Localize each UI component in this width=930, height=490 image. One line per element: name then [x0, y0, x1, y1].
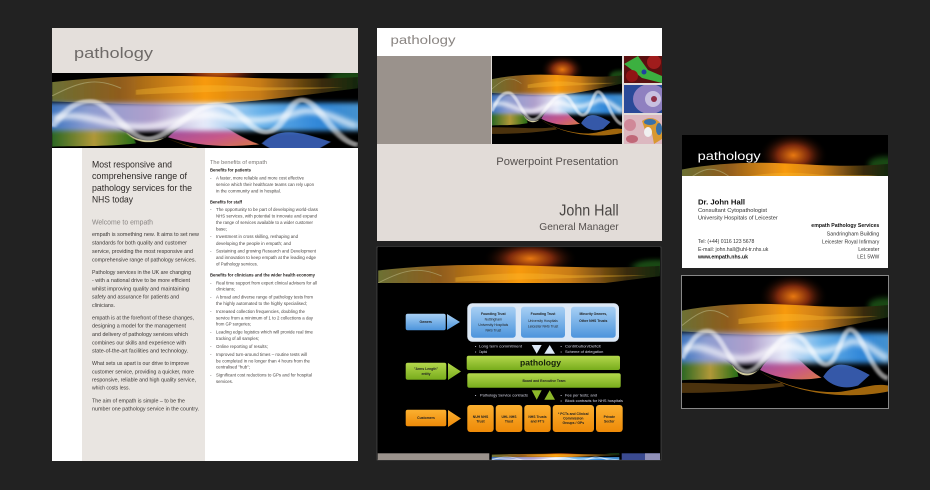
- flow notes: owners to pathology: Contribution/Deficit: [565, 344, 601, 348]
- card address: [811, 223, 880, 261]
- card contact details: [697, 239, 769, 261]
- left column body text: designing a model for the management: [92, 324, 187, 330]
- flow notes: pathology to customers: Block contracts for NHS hospitals: [565, 399, 623, 403]
- right column: benefits of empath: Real time support from expert clinical advisers for all: [216, 280, 317, 285]
- row: customers: Trust: [476, 420, 486, 424]
- owner cards: NHS Trust: [485, 328, 501, 332]
- right column: benefits of empath: the highly automated to the highly specialised;: [216, 301, 307, 306]
- right column: benefits of empath: service from a minimum of 1 to 2 collections a day: [216, 315, 314, 320]
- right column: benefits of empath: -: [210, 352, 212, 357]
- left column body text: Pathology services in the UK are changing: [92, 270, 191, 276]
- card address: LE1 5WW: [857, 255, 880, 261]
- left column body text: [91, 232, 199, 413]
- microscopy image: blue and purple tissue: [624, 85, 662, 113]
- card address: empath Pathology Services: [811, 223, 880, 229]
- owner cards: Leicester NHS Trust: [528, 324, 558, 328]
- presenter name: John Hall: [559, 202, 619, 220]
- right column: benefits of empath: A faster, more reliable and more cost effective: [216, 175, 304, 180]
- left column body text: combines our skills and experience with: [92, 340, 186, 346]
- chart slide banner: [378, 247, 660, 283]
- card contact details: www.empath.nhs.uk: [697, 255, 748, 261]
- right column: benefits of empath: Significant cost reductions to GPs and for hospital: [216, 373, 312, 378]
- right column: benefits of empath: of Pathology services.: [216, 261, 258, 266]
- row: customers: NHS Trusts: [528, 415, 547, 419]
- row: pathology entity: pathology: [520, 358, 561, 368]
- row: customers: Groups / GPs: [562, 421, 584, 425]
- card address: Leicester: [858, 247, 880, 253]
- row: customers: Sector: [604, 420, 615, 424]
- right column: benefits of empath: be completed in no longer than 4 hours from the: [216, 358, 310, 363]
- owner cards: Founding Trust: [531, 312, 556, 316]
- right column: benefits of empath: Increased collection frequencies, doubling the: [216, 309, 305, 314]
- card contact details: Tel: (+44) 0116 123 5678: [698, 239, 755, 245]
- left column body text: What sets us apart is our drive to improve: [92, 361, 189, 367]
- row: customers: Trust: [505, 420, 514, 424]
- right column: benefits of empath: A broad and diverse range of pathology tests from: [216, 295, 313, 300]
- owner cards: Nottingham: [485, 318, 502, 322]
- left column body text: standards for both quality and customer: [92, 240, 187, 246]
- left column body text: comprehensive range of pathology services.: [92, 257, 196, 263]
- row: customers: UHL NHS: [501, 415, 517, 419]
- right column: benefits of empath: -: [210, 249, 212, 254]
- flow notes: owners to pathology: •: [475, 350, 477, 354]
- right column: benefits of empath: centralised "hub";: [216, 365, 250, 370]
- right column: benefits of empath: and innovation to keep empath at the leading edge: [216, 255, 316, 260]
- brochure headline: pathology services for the: [92, 182, 192, 193]
- presenter role: General Manager: [539, 221, 619, 233]
- card name and role: Dr. John Hall: [698, 198, 745, 206]
- flow notes: pathology to customers: Pathology Service contracts: [480, 394, 528, 398]
- row: pathology entity: Board and Executive Team: [522, 379, 566, 383]
- slide subtitle: Powerpoint Presentation: [496, 156, 618, 168]
- row: owners: Owners: [419, 320, 432, 324]
- brochure headline: [92, 158, 192, 205]
- welcome heading: Welcome to empath: [92, 220, 153, 226]
- left column body text: safety and assurance for patients and: [92, 295, 179, 301]
- right column: benefits of empath: -: [210, 344, 212, 349]
- left column body text: The aim of empath is simple – to be the: [92, 398, 185, 404]
- flow notes: owners to pathology: Capital: [479, 350, 487, 354]
- right column: benefits of empath: -: [210, 295, 212, 300]
- owner cards: [471, 307, 616, 338]
- brochure headline: Most responsive and: [92, 158, 172, 170]
- right column: benefits of empath: Online reporting of results;: [216, 344, 268, 349]
- right column: benefits of empath: The opportunity to be part of developing world-class: [216, 207, 319, 212]
- brochure headline: comprehensive range of: [92, 170, 187, 181]
- slide footer strip: [378, 450, 660, 466]
- card name and role: [698, 198, 778, 222]
- card name and role: University Hospitals of Leicester: [698, 216, 778, 222]
- left column body text: customer service, providing a quicker, more: [92, 369, 194, 375]
- flow notes: owners to pathology: [475, 344, 603, 354]
- owner cards: Founding Trust: [481, 312, 507, 316]
- right column: benefits of empath: from GP surgeries;: [216, 322, 251, 327]
- owner cards: Minority Owners,: [580, 312, 607, 316]
- left column body text: and delivery of pathology services which: [92, 332, 188, 338]
- right column: benefits of empath: service which their healthcare teams can rely upon: [216, 182, 314, 187]
- left column body text: - with a national drive to be more efficient: [92, 278, 190, 284]
- row: customers: NUH NHS: [473, 415, 489, 419]
- card header image: [682, 135, 888, 176]
- right column: benefits of empath: Improved turn-around times – routine tests will: [216, 352, 307, 357]
- owner cards: University Hospitals: [528, 319, 558, 323]
- card logo: pathology: [698, 149, 761, 163]
- right column: benefits of empath: the range of services available to a wider customer: [216, 220, 313, 225]
- left column body text: which costs less.: [91, 386, 130, 392]
- row: customers: Private: [604, 415, 615, 419]
- slide main image: [492, 56, 622, 144]
- row: customers: Customers: [417, 416, 435, 420]
- right column: benefits of empath: Benefits for clinicians and the wider health economy: [210, 272, 315, 277]
- card contact details: E-mail: john.hall@uhl-tr.nhs.uk: [698, 247, 769, 253]
- right column: benefits of empath: -: [210, 207, 212, 212]
- flow notes: pathology to customers: •: [475, 394, 477, 398]
- flow notes: owners to pathology: •: [560, 344, 562, 348]
- right column: benefits of empath: base;: [216, 226, 227, 231]
- full artwork: [682, 276, 888, 408]
- left column body text: clinicians.: [92, 303, 115, 309]
- right column: benefits of empath: [210, 160, 319, 384]
- right column: benefits of empath: Leading edge logistics which will provide real time: [216, 330, 313, 335]
- panel: organisation chart slide: [369, 239, 678, 466]
- flow notes: pathology to customers: •: [560, 399, 562, 403]
- right column: benefits of empath: clinicians;: [216, 287, 235, 292]
- right column: benefits of empath: -: [210, 330, 212, 335]
- row: pathology entity: entity: [421, 372, 431, 376]
- right column: benefits of empath: -: [210, 373, 212, 378]
- flow notes: pathology to customers: •: [560, 394, 562, 398]
- row: pathology entity: "Arms Length": [414, 367, 438, 371]
- slide logo: pathology: [390, 35, 456, 47]
- flow notes: owners to pathology: •: [560, 350, 562, 354]
- right column: benefits of empath: -: [210, 234, 212, 239]
- right column: benefits of empath: Sustaining and growing Research and Development: [216, 249, 317, 254]
- flow notes: owners to pathology: Long term commitment: [479, 344, 522, 348]
- card name and role: Consultant Cytopathologist: [698, 208, 768, 214]
- flow notes: owners to pathology: •: [475, 344, 477, 348]
- brochure logo: pathology: [74, 45, 154, 62]
- left column body text: service, providing the most responsive and: [92, 249, 193, 255]
- owner cards: Other NHS Trusts: [579, 319, 608, 323]
- right column: benefits of empath: Investment in cross skilling, reshaping and: [216, 234, 298, 239]
- left column body text: responsive, reliable and high quality service,: [92, 378, 196, 384]
- panel: business card reverse: [675, 273, 901, 408]
- microscopy image: stained cells: [624, 115, 662, 144]
- right column: benefits of empath: developing the people in empath; and: [216, 241, 291, 246]
- row: owners: [406, 303, 619, 342]
- right column: benefits of empath: in the community and in hospital.: [216, 188, 281, 193]
- right column: benefits of empath: tracking of all samples;: [216, 336, 259, 341]
- card address: Leicester Royal Infirmary: [822, 239, 880, 245]
- brochure headline: NHS today: [92, 194, 133, 205]
- right column: benefits of empath: The benefits of empath: [210, 160, 267, 166]
- right column: benefits of empath: NHS services, with potential to innovate and expand: [216, 213, 317, 218]
- right column: benefits of empath: services.: [216, 379, 233, 384]
- row: customers: Commission: [563, 416, 583, 420]
- brochure banner image: [52, 73, 358, 148]
- row: customers: and FT's: [531, 420, 545, 424]
- panel: powerpoint title slide: [377, 28, 667, 241]
- panel: business card: [675, 132, 901, 268]
- right column: benefits of empath: -: [210, 175, 212, 180]
- right column: benefits of empath: Benefits for patients: [210, 168, 251, 173]
- row: customers: [406, 405, 623, 432]
- left column body text: empath is at the forefront of these changes,: [92, 315, 194, 321]
- flow notes: pathology to customers: Fee per tests; and: [565, 394, 597, 398]
- owner cards: University Hospitals: [478, 323, 508, 327]
- row: customers: * PCTs and Clinical: [558, 412, 589, 416]
- card address: Sandringham Building: [827, 232, 880, 238]
- flow notes: pathology to customers: [475, 390, 623, 403]
- left column body text: state-of-the-art facilities and technology.: [92, 348, 188, 354]
- panel: brochure page: [42, 28, 378, 461]
- row: pathology entity: [406, 356, 621, 388]
- flow notes: owners to pathology: Scheme of delegation: [565, 350, 603, 354]
- right column: benefits of empath: Benefits for staff: [210, 199, 242, 204]
- right column: benefits of empath: -: [210, 309, 212, 314]
- left column body text: whilst improving quality and maintaining: [91, 286, 189, 292]
- microscopy image: green and red cells: [624, 56, 662, 83]
- left column body text: empath is something new. It aims to set new: [92, 232, 199, 238]
- right column: benefits of empath: -: [210, 280, 212, 285]
- left column body text: number one pathology service in the country.: [92, 407, 199, 413]
